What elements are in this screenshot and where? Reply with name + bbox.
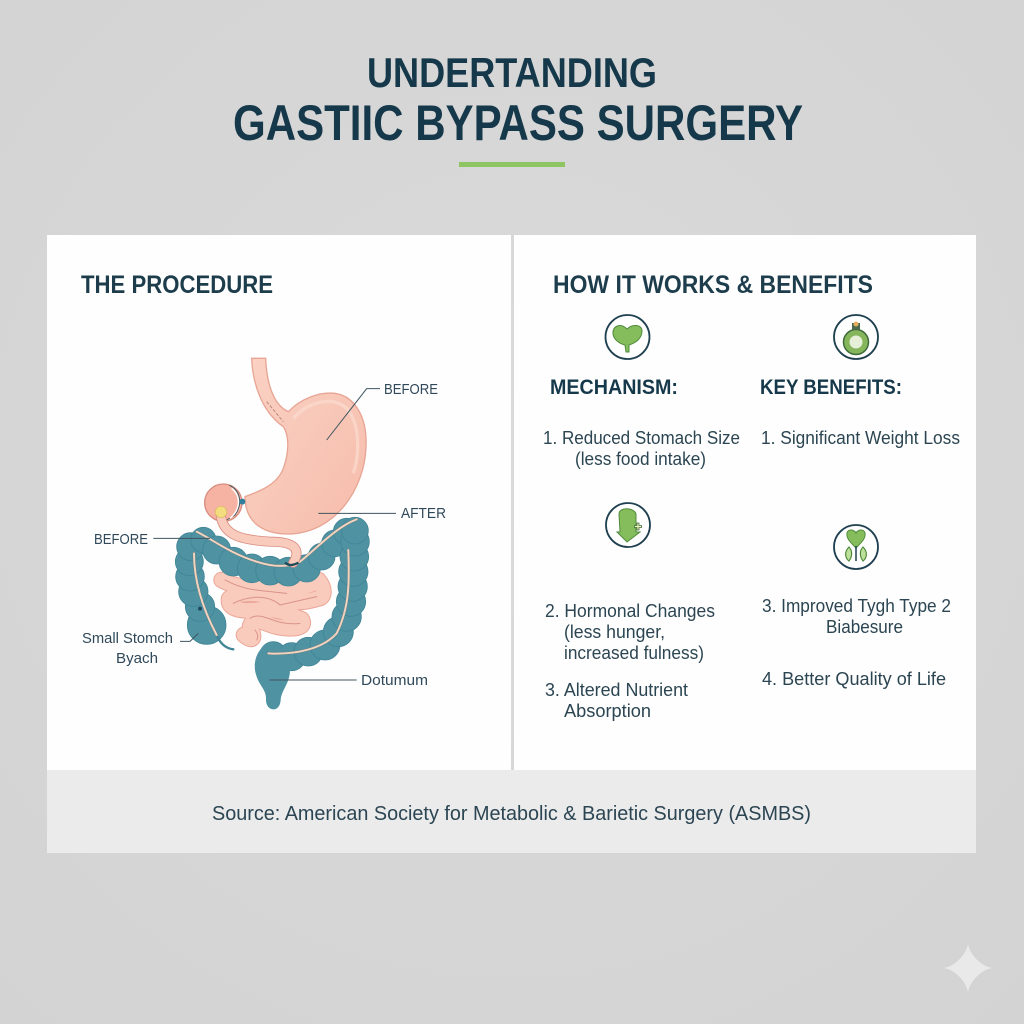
title: GASTIIC BYPASS SURGERY (233, 95, 803, 151)
heading: how it works: HOW IT WORKS & BENEFITS (553, 271, 873, 299)
panel: the procedure (47, 235, 511, 770)
gastric pouch (205, 484, 242, 521)
title (233, 49, 803, 151)
esophagus and stomach (245, 358, 366, 534)
text: mechanism 1 (543, 428, 740, 469)
heading: key benefits: KEY BENEFITS: (760, 376, 902, 399)
title accent bar (459, 162, 565, 167)
panel: how it works and benefits (514, 235, 976, 770)
text: benefit 3 (762, 596, 951, 637)
text: mechanism 3: Absorption (564, 701, 651, 721)
bypass limb (221, 515, 296, 563)
icon: pill bottle (834, 315, 878, 359)
colon (175, 517, 369, 709)
heading: the procedure: THE PROCEDURE (81, 271, 273, 299)
label: before top: BEFORE (384, 381, 438, 398)
text: benefit 4: 4. Better Quality of Life (762, 669, 946, 689)
small intestine (222, 580, 323, 640)
title: UNDERTANDING (367, 49, 657, 96)
transverse colon (191, 518, 360, 586)
label: dotumum: Dotumum (361, 672, 428, 689)
heading: mechanism: MECHANISM: (550, 376, 678, 399)
text: mechanism 1: (less food intake) (575, 449, 706, 469)
label: small stomach pouch: Small Stomch (82, 630, 173, 647)
text: benefit 3: Biabesure (826, 617, 903, 637)
text: mechanism 2 (545, 601, 715, 663)
label: after: AFTER (401, 505, 446, 522)
icon: heart with leaves (834, 525, 878, 569)
icon: arrow down (606, 503, 650, 547)
label: small stomach pouch (82, 630, 173, 667)
text: mechanism 2: 2. Hormonal Changes (545, 601, 715, 621)
leader lines (153, 389, 396, 680)
label: before left: BEFORE (94, 531, 148, 548)
text: mechanism 2: (less hunger, (564, 622, 665, 642)
descending colon (260, 517, 369, 671)
text: mechanism 3: 3. Altered Nutrient (545, 680, 688, 700)
footer source bar: Source: American Society for Metabolic & Barietic Surgery (ASMBS) (212, 803, 811, 825)
text: mechanism 2: increased fulness) (564, 643, 704, 663)
icon: stomach (606, 315, 650, 359)
rectum (255, 642, 290, 709)
text: mechanism 3 (545, 680, 688, 721)
text: benefit 3: 3. Improved Tygh Type 2 (762, 596, 951, 616)
label: small stomach pouch: Byach (116, 650, 158, 667)
icon: sparkle (944, 944, 992, 992)
intestinal limb inside colon (194, 519, 357, 654)
anatomy diagram (153, 358, 396, 709)
tail (217, 635, 233, 649)
ascending colon (175, 533, 226, 644)
text: mechanism 1: 1. Reduced Stomach Size (543, 428, 740, 448)
footer source bar (47, 770, 976, 853)
text: benefit 1: 1. Significant Weight Loss (761, 428, 960, 448)
